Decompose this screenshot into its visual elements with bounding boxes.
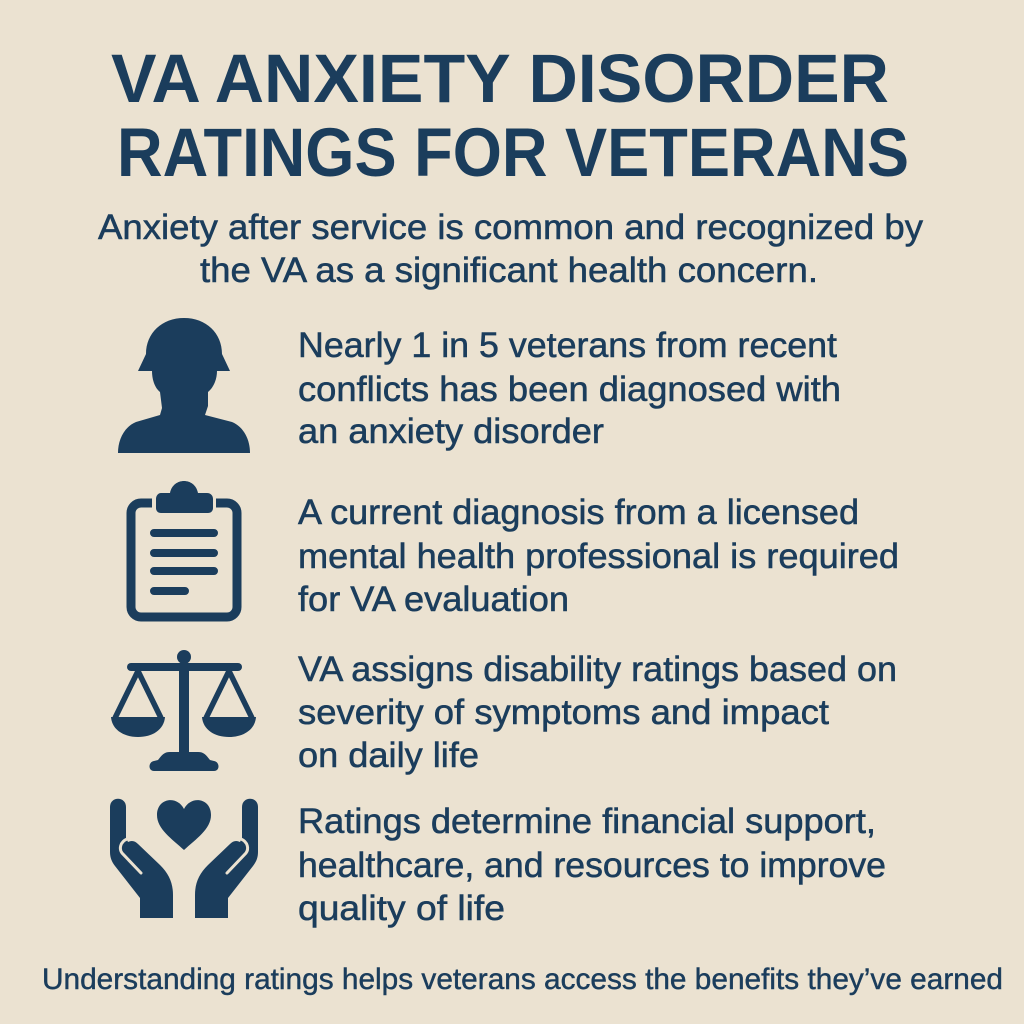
title: VA ANXIETY DISORDER — [111, 40, 889, 117]
text: financial support: healthcare, and resources to improve — [298, 846, 886, 885]
icon: hands holding heart — [110, 799, 258, 918]
text: disability ratings: severity of symptoms and impact — [298, 693, 829, 732]
icon: soldier — [118, 318, 250, 453]
icon: scales of justice — [111, 650, 256, 771]
icon: clipboard — [131, 481, 237, 617]
text: veterans diagnosed: Nearly 1 in 5 veterans from recent — [298, 326, 837, 365]
text: financial support: quality of life — [298, 889, 505, 928]
text: veterans diagnosed: conflicts has been diagnosed with — [298, 370, 841, 409]
subtitle: the VA as a significant health concern. — [200, 251, 818, 290]
text: financial support: Ratings determine financial support, — [298, 802, 876, 841]
text: veterans diagnosed: an anxiety disorder — [298, 412, 604, 451]
text: current diagnosis: for VA evaluation — [298, 580, 569, 619]
text: current diagnosis — [298, 493, 899, 619]
subtitle: Anxiety after service is common and recognized by — [98, 208, 924, 247]
text: current diagnosis: A current diagnosis from a licensed — [298, 493, 859, 532]
footer: Understanding ratings helps veterans access the benefits they’ve earned — [42, 963, 1003, 996]
subtitle — [98, 208, 924, 290]
text: current diagnosis: mental health professional is required — [298, 537, 899, 576]
text: financial support — [298, 802, 886, 928]
title: RATINGS FOR VETERANS — [117, 114, 909, 191]
title — [111, 40, 909, 191]
text: disability ratings: VA assigns disability ratings based on — [298, 650, 897, 689]
text: disability ratings — [298, 650, 897, 775]
text: veterans diagnosed — [298, 326, 841, 451]
text: disability ratings: on daily life — [298, 736, 479, 775]
